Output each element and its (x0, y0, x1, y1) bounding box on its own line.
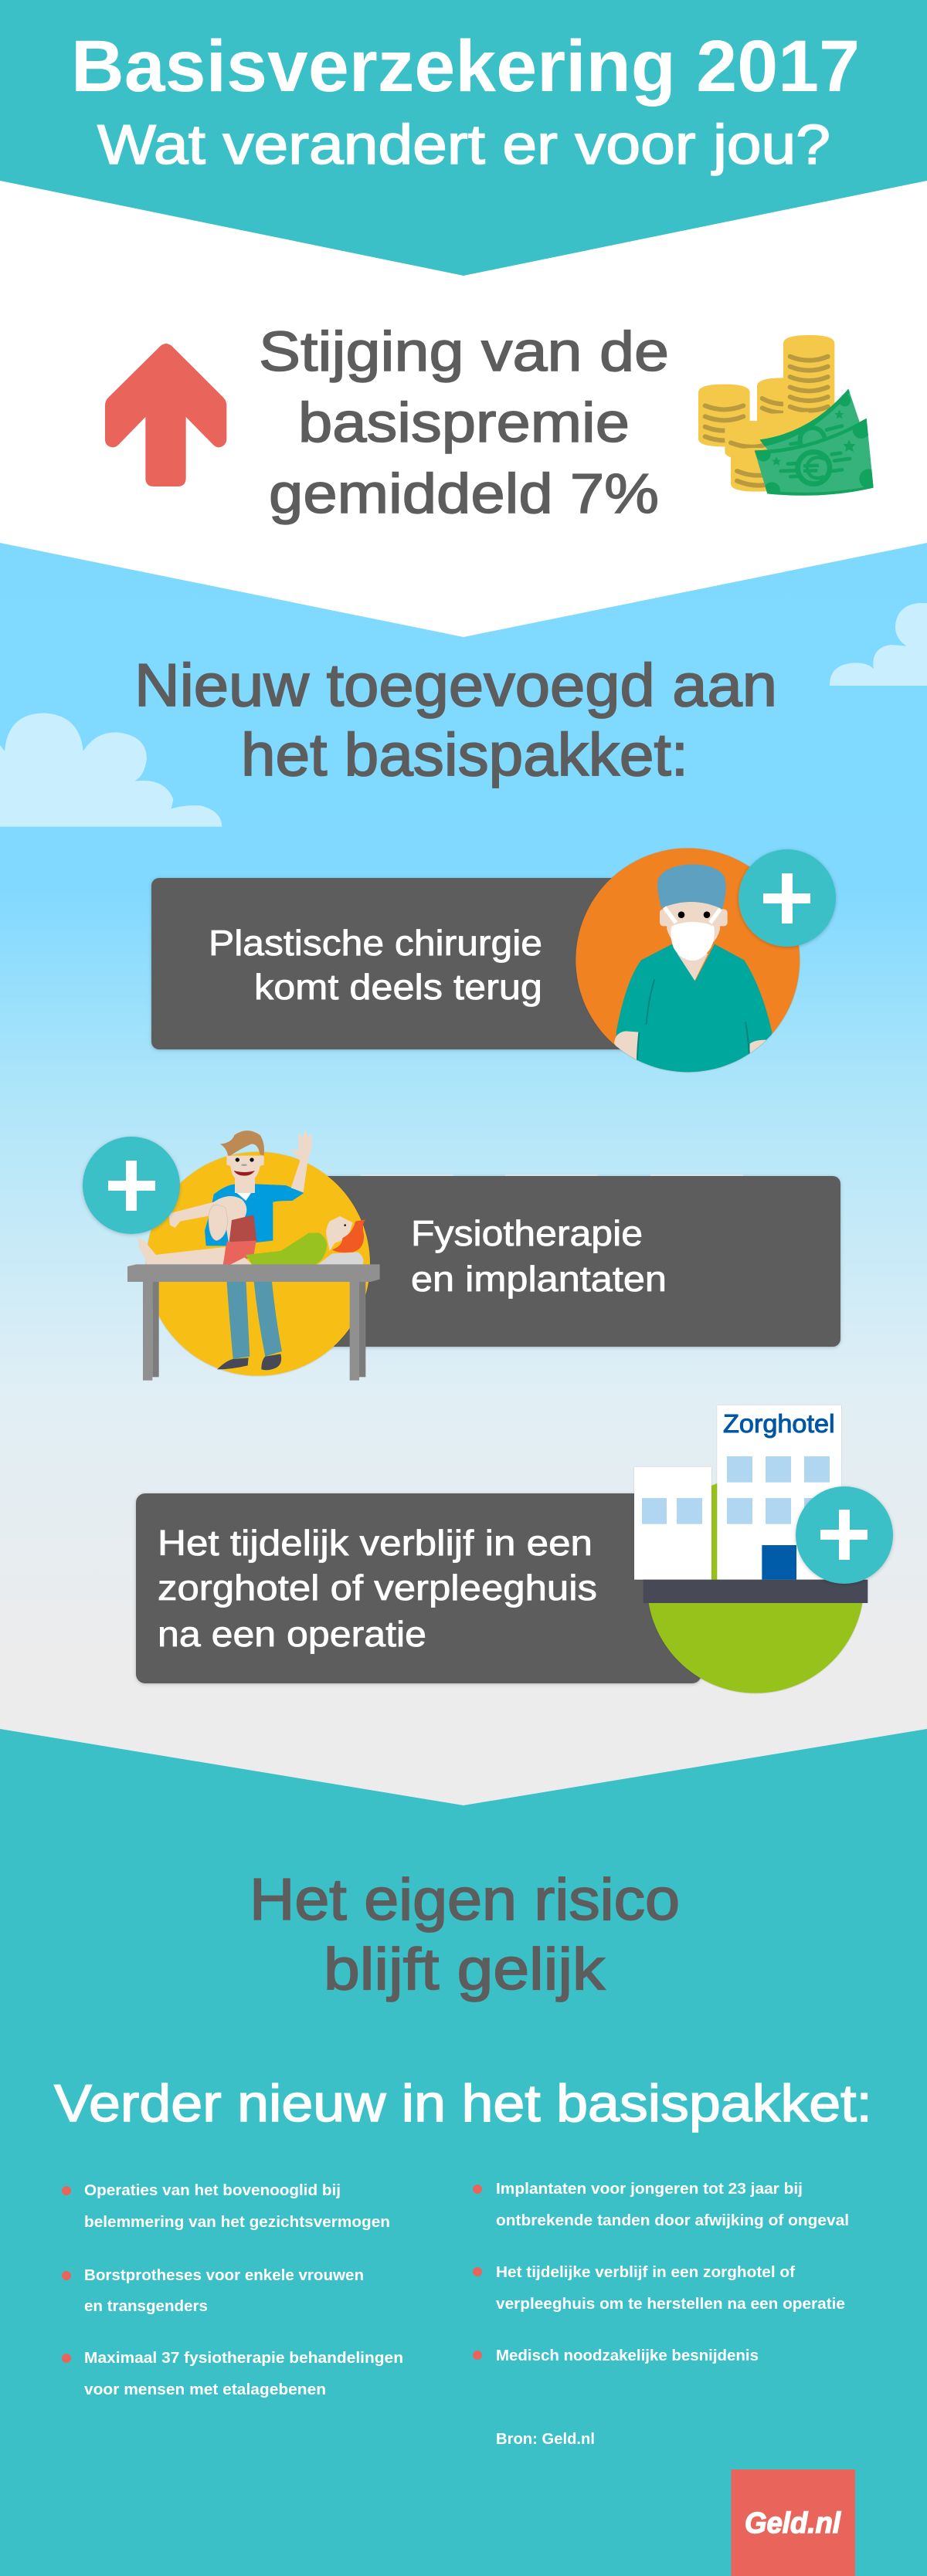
list: right column (473, 2181, 849, 2364)
list: left column: belemmering van het gezichtsvermogen (84, 2214, 390, 2231)
list: left column (62, 2182, 403, 2398)
list: right column: ontbrekende tanden door afwijking of ongeval (496, 2212, 849, 2229)
icon: coins and banknotes (698, 335, 879, 499)
list: right column: Medisch noodzakelijke besnijdenis (496, 2347, 759, 2364)
text box: zorghotel of verpleeghuis (158, 1568, 597, 1608)
icon: plus badge (796, 1486, 893, 1584)
list: left column: en transgenders (84, 2298, 208, 2315)
list: right column: Implantaten voor jongeren tot 23 jaar bij (496, 2181, 803, 2198)
icon: physiotherapist and patient (127, 1130, 380, 1381)
heading: eigen risico: blijft gelijk (324, 1937, 606, 2002)
list: right column: Het tijdelijke verblijf in een zorghotel of (496, 2264, 795, 2281)
panel: header (0, 0, 927, 276)
icon: plus badge (83, 1137, 180, 1234)
cloud right (830, 603, 927, 686)
icon: red up arrow (105, 344, 226, 486)
list: left column: Operaties van het bovenooglid bij (84, 2182, 341, 2199)
source: Bron: Geld.nl (496, 2431, 595, 2448)
list: left column: Borstprotheses voor enkele vrouwen (84, 2267, 364, 2284)
text box (136, 1493, 701, 1683)
icon: plus badge (739, 849, 836, 947)
premium text (259, 321, 669, 525)
premium text: Stijging van de (259, 321, 669, 383)
subtitle: Wat verandert er voor jou? (97, 114, 830, 176)
heading: eigen risico (250, 1867, 680, 2002)
panel: sky background (0, 154, 927, 1930)
premium text: gemiddeld 7% (269, 463, 659, 525)
text box: en implantaten (411, 1259, 667, 1299)
heading: nieuw toegevoegd (134, 651, 777, 788)
text box: Fysiotherapie (411, 1213, 643, 1253)
icon: hotel building (634, 1405, 868, 1693)
panel: plastic surgery (151, 848, 836, 1081)
text box (151, 878, 692, 1049)
text box: na een operatie (158, 1614, 426, 1654)
heading: nieuw toegevoegd: het basispakket: (241, 720, 688, 788)
cloud left (0, 713, 222, 827)
text box: komt deels terug (254, 967, 542, 1007)
text box: Plastische chirurgie (209, 923, 542, 963)
premium text: basispremie (298, 392, 630, 454)
list: right column: verpleeghuis om te herstellen na een operatie (496, 2296, 845, 2313)
heading: eigen risico: Het eigen risico (250, 1867, 680, 1933)
panel: care hotel (136, 1405, 893, 1693)
list: left column: Maximaal 37 fysiotherapie behandelingen (84, 2350, 403, 2367)
icon: hotel building: Zorghotel (723, 1410, 835, 1439)
text box: Het tijdelijk verblijf in een (158, 1523, 593, 1563)
panel: physiotherapy (83, 1130, 840, 1381)
text box (309, 1174, 840, 1347)
heading: nieuw toegevoegd: Nieuw toegevoegd aan (134, 651, 777, 719)
panel: premium increase (0, 154, 927, 637)
list: left column: voor mensen met etalagebenen (84, 2381, 326, 2398)
panel: bottom section (0, 1729, 927, 2576)
title: Basisverzekering 2017 (71, 25, 860, 107)
logo: Geld.nl: Geld.nl (745, 2507, 841, 2540)
logo: Geld.nl (731, 2469, 855, 2576)
heading: verder nieuw: Verder nieuw in het basispakket: (54, 2074, 872, 2133)
icon: surgeon (576, 848, 800, 1081)
